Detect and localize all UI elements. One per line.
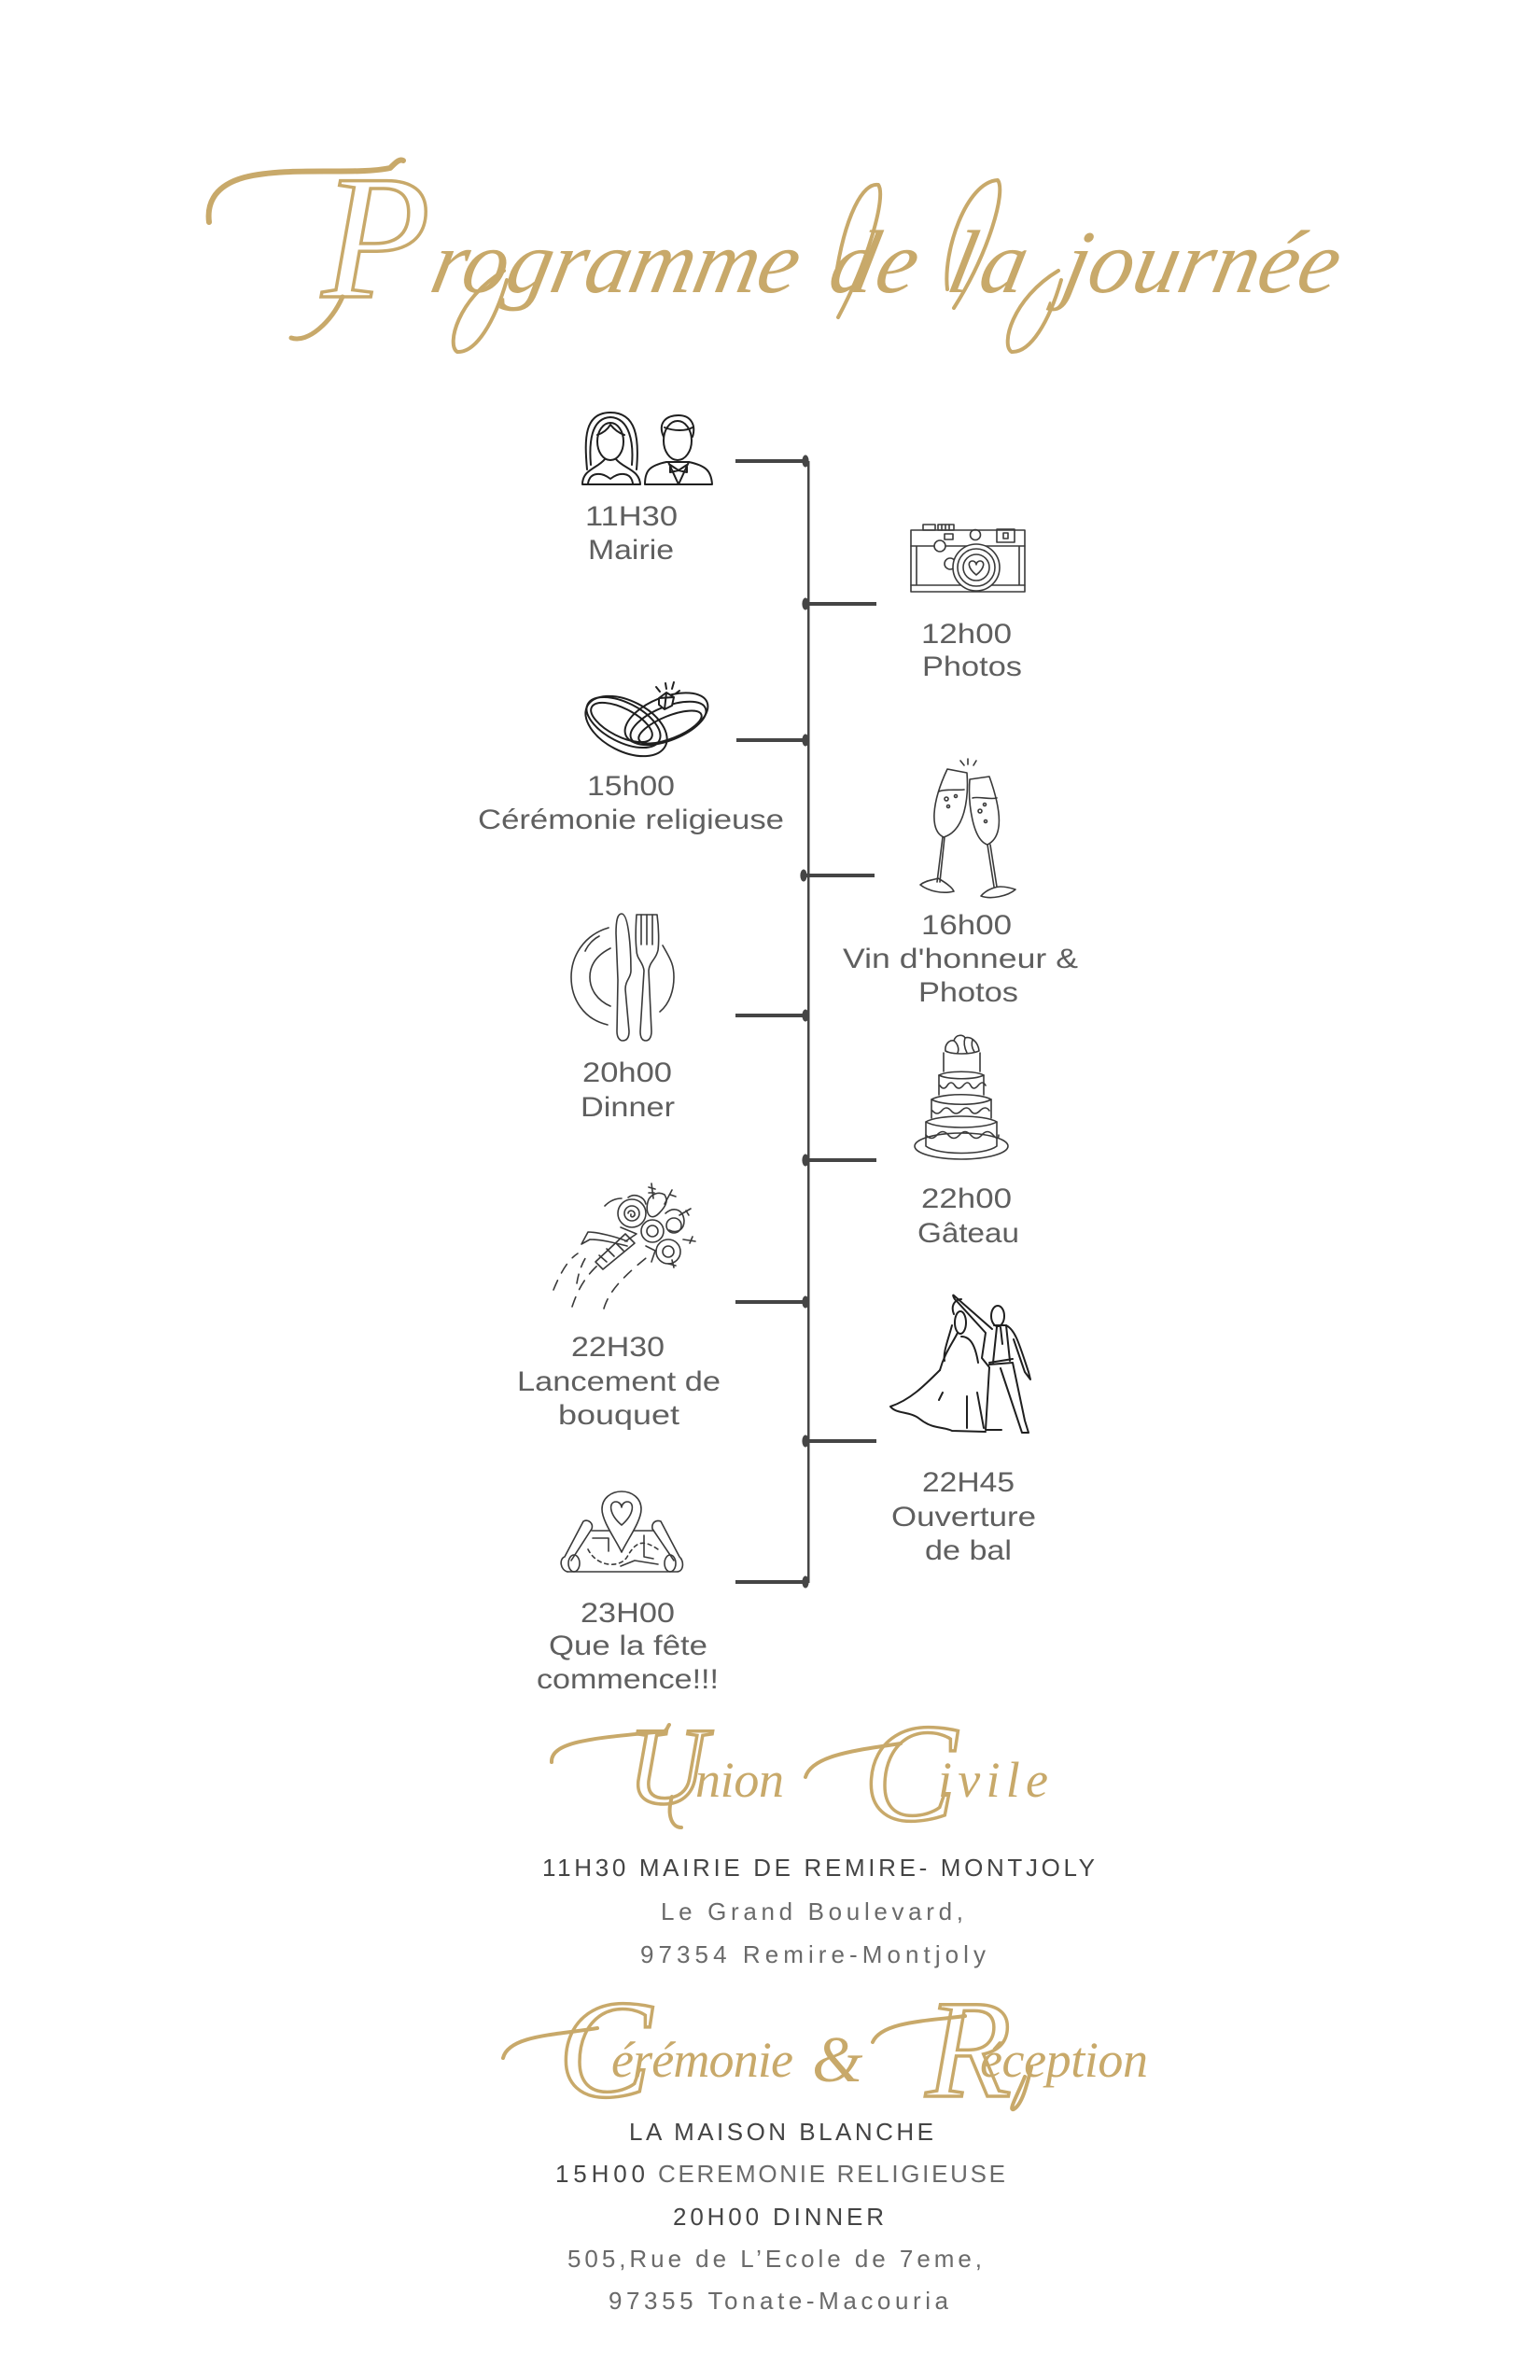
venue block: ceremony and reception <box>555 2118 1005 2315</box>
icon: map with heart pin <box>561 1491 682 1572</box>
label <box>581 1057 675 1123</box>
item: 23H00 Que la fête commence <box>537 1491 719 1695</box>
heading: Cérémonie & Réception: érémonie <box>611 2032 793 2088</box>
label: Cérémonie religieuse <box>478 805 784 835</box>
heading: Cérémonie & Réception <box>503 1972 1148 2127</box>
label: Vin d'honneur & <box>843 944 1078 974</box>
label: 15h00 <box>587 771 675 802</box>
heading: Cérémonie & Réception: C <box>558 1972 653 2127</box>
item: 20h00 Dinner <box>571 914 675 1123</box>
label <box>585 501 678 566</box>
venue block: civil union: 97354 Remire-Montjoly <box>640 1940 986 1968</box>
venue block: ceremony and reception: CEREMONIE RELIGIEUSE <box>658 2160 1005 2188</box>
venue block: ceremony and reception: 97355 Tonate-Macouria <box>609 2287 949 2315</box>
item: 22H45 Ouverture de bal <box>890 1295 1036 1566</box>
label: commence!!! <box>537 1664 719 1695</box>
title <box>209 140 1351 352</box>
item: 11H30 Mairie <box>582 413 712 566</box>
label: 12h00 <box>921 619 1012 650</box>
label: 22H30 <box>571 1332 665 1363</box>
label: 16h00 <box>921 910 1012 941</box>
label: 22h00 <box>921 1183 1012 1214</box>
label <box>921 619 1022 682</box>
item: 12h00 Photos <box>911 525 1025 682</box>
label: bouquet <box>558 1400 680 1431</box>
heading: Union Civile: C <box>863 1696 959 1851</box>
label <box>537 1598 719 1695</box>
label: Photos <box>922 651 1022 682</box>
label: Dinner <box>581 1092 675 1123</box>
icon: champagne flutes <box>920 759 1015 898</box>
icon: bouquet <box>553 1183 695 1309</box>
heading: Union Civile <box>552 1696 1048 1851</box>
item: 22h00 Gâteau <box>915 1035 1019 1249</box>
venue block: civil union: Le Grand Boulevard, <box>661 1897 963 1925</box>
venue block: ceremony and reception: 20H00 DINNER <box>673 2203 884 2231</box>
label: de bal <box>925 1535 1012 1566</box>
label: Mairie <box>588 535 674 566</box>
icon: bride and groom <box>582 413 712 484</box>
icon: dancing couple <box>890 1295 1030 1433</box>
icon: wedding cake <box>915 1035 1008 1159</box>
connectors right <box>800 597 876 1447</box>
heading: Union Civile: nion <box>695 1752 784 1808</box>
heading: Cérémonie & Réception: & <box>812 2024 863 2096</box>
venue block: ceremony and reception: 505,Rue de L’Ecole de 7eme, <box>567 2245 982 2273</box>
heading: Cérémonie & Réception: éception <box>980 2032 1148 2088</box>
icon: wedding rings <box>576 682 715 768</box>
venue block: ceremony and reception: LA MAISON BLANCHE <box>629 2118 933 2146</box>
heading: Union Civile: U <box>627 1705 713 1827</box>
label <box>843 910 1078 1008</box>
label: 11H30 <box>585 501 678 532</box>
title: journée <box>1045 212 1351 312</box>
title: de <box>822 212 929 312</box>
label <box>917 1183 1019 1249</box>
timeline <box>735 455 876 1589</box>
label: Photos <box>918 977 1018 1008</box>
heading: Cérémonie & Réception: R <box>925 1972 1012 2127</box>
icon: camera <box>911 525 1025 592</box>
label: 23H00 <box>581 1598 675 1629</box>
icon: plate and cutlery <box>571 914 674 1041</box>
venue block: civil union <box>542 1854 1095 1968</box>
label: Gâteau <box>917 1218 1019 1249</box>
venue block: civil union: 11H30 MAIRIE DE REMIRE- MONTJOLY <box>542 1854 1095 1882</box>
label: Que la fête <box>549 1631 707 1661</box>
item: 16h00 Vin d'honneur <box>843 759 1078 1008</box>
label: Ouverture <box>891 1502 1036 1533</box>
connectors left <box>735 455 809 1589</box>
label: Lancement de <box>517 1366 721 1397</box>
label: 20h00 <box>582 1057 672 1088</box>
venue block: ceremony and reception: 15H00 <box>555 2160 645 2188</box>
title: la <box>941 212 1038 312</box>
heading: Union Civile: ivile <box>938 1752 1048 1808</box>
item: 15h00 Cérémonie religieuse <box>478 682 784 835</box>
item: 22H30 Lancement de bouquet <box>517 1183 721 1431</box>
label: 22H45 <box>922 1467 1015 1498</box>
title: P <box>320 140 430 336</box>
label <box>891 1467 1036 1566</box>
label <box>478 771 784 835</box>
title: rogramme <box>424 212 810 312</box>
label <box>517 1332 721 1431</box>
